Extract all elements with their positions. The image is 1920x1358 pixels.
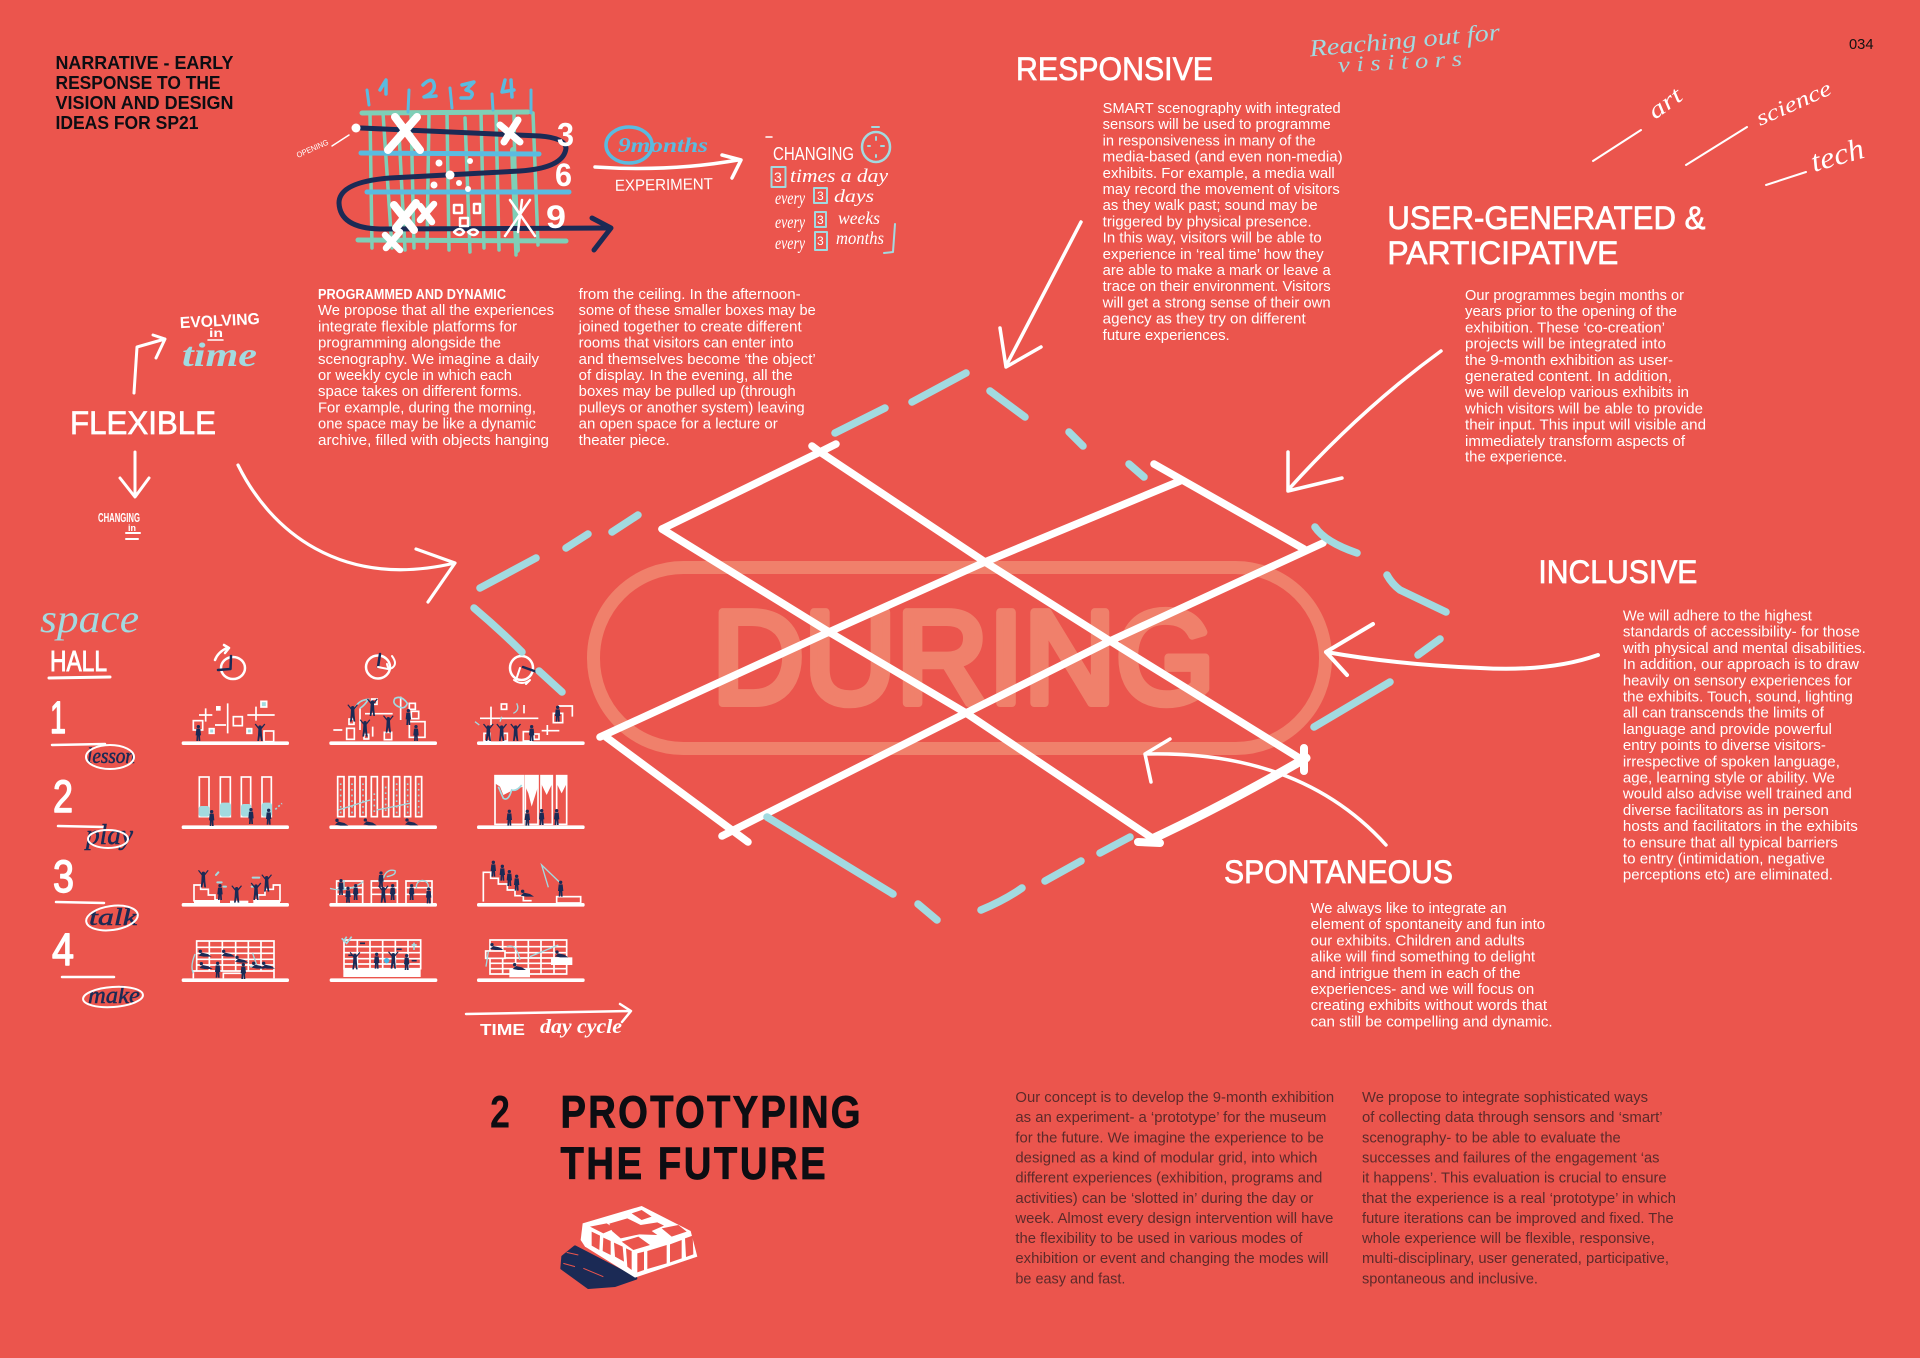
body text: prototyping columns: whole experience will be flexible, responsive, xyxy=(1361,1231,1655,1247)
heading and text: inclusive: to ensure that all typical barriers xyxy=(1623,835,1838,851)
heading and text: responsive: will get a strong sense of their own xyxy=(1102,296,1331,312)
sketch: 9 months experiment arrow xyxy=(595,127,741,195)
body text: prototyping columns: future iterations can be improved and fixed. The xyxy=(1362,1211,1674,1227)
section heading: prototyping the future: THE FUTURE xyxy=(560,1138,826,1189)
body text: prototyping columns: it happens’. This evaluation is crucial to ensure xyxy=(1362,1171,1667,1187)
note: changing in: in xyxy=(128,523,136,533)
note: art science tech xyxy=(1593,75,1868,185)
heading and text: inclusive: would also advise well trained and xyxy=(1622,787,1852,803)
heading and text: inclusive xyxy=(1538,554,1866,884)
body text: prototyping columns: Our concept is to develop the 9-month exhibition xyxy=(1015,1090,1334,1106)
arrow: flexible to grid xyxy=(238,465,455,602)
heading and text: user-generated and participative: PARTICIPATIVE xyxy=(1387,235,1618,271)
row labels: lesson play talk make: make xyxy=(88,983,140,1009)
note: evolving in time: time xyxy=(182,337,257,374)
heading and text: user-generated and participative: years prior to the opening of the xyxy=(1465,304,1677,320)
heading and text: spontaneous: and intrigue them in each of the xyxy=(1311,966,1521,982)
text block: programmed and dynamic: theater piece. xyxy=(579,433,670,449)
text block: programmed and dynamic: some of these smaller boxes may be xyxy=(579,303,816,319)
sketch: nine month grid timeline: 3 xyxy=(557,116,574,153)
arrow: spontaneous xyxy=(1145,739,1386,845)
body text: prototyping columns: that the experience is a real ‘prototype’ in which xyxy=(1362,1191,1676,1207)
row labels: lesson play talk make: 4 xyxy=(52,924,74,975)
note: reaching out for visitors: v i s i t o r s xyxy=(1337,46,1462,77)
heading and text: user-generated and participative: we will develop various exhibits in xyxy=(1464,385,1689,401)
arrow: user-generated xyxy=(1288,351,1441,491)
text block: programmed and dynamic: scenography. We imagine a daily xyxy=(318,352,540,368)
heading and text: inclusive: In addition, our approach is to draw xyxy=(1623,657,1859,673)
body text: prototyping columns: multi-disciplinary, user generated, participative, xyxy=(1362,1251,1669,1267)
scene: lesson evening xyxy=(475,703,585,745)
note: changing in: CHANGING xyxy=(98,510,140,525)
heading and text: spontaneous: creating exhibits without words that xyxy=(1311,998,1547,1014)
note: evolving in time: in xyxy=(209,326,223,340)
text block: programmed and dynamic: one space may be like a dynamic xyxy=(318,416,536,432)
arrow: responsive xyxy=(1000,222,1081,367)
label: space hall: space xyxy=(40,596,139,641)
scene: talk morning xyxy=(182,870,289,907)
heading and text: user-generated and participative xyxy=(1387,200,1706,466)
time day cycle arrow: day cycle xyxy=(540,1016,622,1038)
heading and text: user-generated and participative: which visitors will be able to provide xyxy=(1464,402,1703,418)
sketch: changing schedule notes: weeks xyxy=(838,208,880,228)
sketch: nine month grid timeline: 6 xyxy=(555,157,572,193)
text block: programmed and dynamic: joined together to create different xyxy=(578,320,802,336)
icon: afternoon clock xyxy=(366,654,395,678)
heading and text: responsive: are able to make a mark or leave a xyxy=(1103,263,1332,279)
sketch: nine month grid timeline: 9 xyxy=(546,199,566,235)
row labels: lesson play talk make xyxy=(50,692,144,1009)
heading and text: user-generated and participative: their input. This input will visible and xyxy=(1465,418,1706,434)
text block: programmed and dynamic: PROGRAMMED AND DYNAMIC xyxy=(318,287,506,303)
note: evolving in time xyxy=(179,311,260,374)
scene: play evening xyxy=(477,776,585,829)
body text: prototyping columns: spontaneous and inclusive. xyxy=(1362,1272,1538,1288)
heading and text: user-generated and participative: generated content. In addition, xyxy=(1465,369,1672,385)
sketch: changing schedule notes: 3 xyxy=(817,234,824,248)
heading and text: responsive: future experiences. xyxy=(1103,328,1230,344)
sketch: changing schedule notes: every xyxy=(775,188,805,208)
text block: programmed and dynamic xyxy=(318,287,816,449)
heading: flexible: FLEXIBLE xyxy=(70,405,216,441)
row labels: lesson play talk make: play xyxy=(84,820,134,851)
text block: programmed and dynamic: programming alongside the xyxy=(318,336,501,352)
heading and text: inclusive: irrespective of spoken language, xyxy=(1623,754,1840,770)
text block: programmed and dynamic: an open space for a lecture or xyxy=(579,416,778,432)
heading and text: responsive: exhibits. For example, a media wall xyxy=(1103,166,1335,182)
dashed outer platform xyxy=(474,373,1446,920)
space by time matrix xyxy=(182,697,585,982)
heading and text: inclusive: perceptions etc) are eliminated. xyxy=(1623,868,1833,884)
heading and text: spontaneous: We always like to integrate an xyxy=(1311,901,1507,917)
heading and text: inclusive: hosts and facilitators in the exhibits xyxy=(1623,819,1858,835)
heading and text: user-generated and participative: projects will be integrated into xyxy=(1465,336,1666,352)
document title: VISION AND DESIGN xyxy=(56,93,234,113)
time day cycle arrow: TIME xyxy=(480,1022,525,1039)
arrow: flexible down to changing xyxy=(120,452,149,497)
scene: play morning xyxy=(182,777,289,829)
body text: prototyping columns xyxy=(1014,1090,1676,1288)
heading and text: spontaneous: SPONTANEOUS xyxy=(1224,854,1453,890)
text block: programmed and dynamic: rooms that visitors can enter into xyxy=(579,336,794,352)
icon: evening clock xyxy=(510,656,537,684)
row labels: lesson play talk make: 2 xyxy=(53,771,73,822)
heading and text: responsive: experience in ‘real time’ how they xyxy=(1103,247,1324,263)
sketch: 9 months experiment arrow: EXPERIMENT xyxy=(615,176,713,195)
heading and text: inclusive: with physical and mental disabilities. xyxy=(1622,641,1866,657)
modular grid diagram xyxy=(600,444,1323,843)
heading and text: responsive: RESPONSIVE xyxy=(1016,51,1213,87)
body text: prototyping columns: as an experiment- a ‘prototype’ for the museum xyxy=(1015,1110,1326,1126)
heading and text: inclusive: heavily on sensory experiences for xyxy=(1623,673,1852,689)
during pill background xyxy=(594,568,1326,748)
heading and text: user-generated and participative: the 9-month exhibition as user- xyxy=(1465,353,1673,369)
body text: prototyping columns: different experiences (exhibition, programs and xyxy=(1015,1171,1322,1187)
text block: programmed and dynamic: and themselves become ‘the object’ xyxy=(579,352,816,368)
heading and text: inclusive: to entry (intimidation, negative xyxy=(1623,852,1825,868)
heading and text: spontaneous: element of spontaneity and fun into xyxy=(1311,917,1545,933)
heading and text: responsive: trace on their environment. Visitors xyxy=(1103,279,1331,295)
note: evolving in time: EVOLVING xyxy=(179,311,260,332)
scene: lesson morning xyxy=(182,701,289,745)
arrow: flexible up to evolving xyxy=(134,335,165,393)
text block: programmed and dynamic: or weekly cycle in which each xyxy=(318,368,512,384)
page number: 034 xyxy=(1849,36,1874,53)
icon: morning clock xyxy=(215,645,245,679)
row labels: lesson play talk make: talk xyxy=(89,905,137,931)
note: art science tech: art xyxy=(1643,82,1689,125)
heading and text: responsive: SMART scenography with integrated xyxy=(1103,101,1341,117)
time day cycle arrow xyxy=(466,1004,631,1039)
sketch: changing schedule notes: every xyxy=(775,233,805,253)
heading and text: responsive: In this way, visitors will be able to xyxy=(1103,230,1322,246)
text block: programmed and dynamic: For example, during the morning, xyxy=(318,400,536,416)
text block: programmed and dynamic: from the ceiling. In the afternoon- xyxy=(579,287,801,303)
row labels: lesson play talk make: 1 xyxy=(50,692,66,743)
document title: NARRATIVE - EARLY xyxy=(56,53,234,73)
heading and text: user-generated and participative: the experience. xyxy=(1465,450,1567,466)
heading and text: responsive: in responsiveness in many of the xyxy=(1103,134,1316,150)
body text: prototyping columns: for the future. We imagine the experience to be xyxy=(1015,1130,1324,1146)
heading and text: inclusive: diverse facilitators as in person xyxy=(1623,803,1829,819)
label: space hall xyxy=(40,596,139,678)
sketch: changing schedule notes xyxy=(766,127,895,253)
scene: make afternoon xyxy=(330,937,437,982)
heading and text: inclusive: age, learning style or ability. We xyxy=(1623,770,1835,786)
body text: prototyping columns: of collecting data through sensors and ‘smart’ xyxy=(1362,1110,1663,1126)
scene: talk evening xyxy=(477,861,585,907)
sketch: changing schedule notes: every xyxy=(775,212,805,232)
sketch: changing schedule notes: 3 xyxy=(817,213,824,227)
scene: lesson afternoon xyxy=(329,697,437,745)
document title xyxy=(56,53,234,133)
heading and text: inclusive: We will adhere to the highest xyxy=(1623,608,1812,624)
scene: play afternoon xyxy=(329,777,437,829)
sketch: nine month grid timeline: OPENING xyxy=(295,138,330,160)
row labels: lesson play talk make: lesson xyxy=(87,743,135,768)
heading and text: user-generated and participative: Our programmes begin months or xyxy=(1465,288,1684,304)
sketch: 9 months experiment arrow: 9months xyxy=(618,133,708,157)
section heading: prototyping the future: PROTOTYPING xyxy=(560,1087,861,1137)
note: art science tech: science xyxy=(1752,75,1835,131)
row labels: lesson play talk make: 3 xyxy=(53,851,74,902)
text block: programmed and dynamic: pulleys or another system) leaving xyxy=(579,400,805,416)
heading and text: inclusive: entry points to diverse visitors- xyxy=(1623,738,1826,754)
during pill background: DURING xyxy=(712,584,1215,731)
section heading: prototyping the future: 2 xyxy=(490,1087,510,1138)
text block: programmed and dynamic: We propose that all the experiences xyxy=(318,303,554,319)
text block: programmed and dynamic: archive, filled with objects hanging xyxy=(318,433,549,449)
arrow: inclusive xyxy=(1326,624,1598,675)
heading and text: responsive: agency as they try on different xyxy=(1103,312,1306,328)
heading and text: responsive: sensors will be used to programme xyxy=(1103,117,1331,133)
body text: prototyping columns: activities) can be ‘slotted in’ during the day or xyxy=(1015,1191,1314,1207)
sketch: changing schedule notes: times a day xyxy=(790,166,889,187)
text block: programmed and dynamic: of display. In the evening, all the xyxy=(579,368,793,384)
heading and text: inclusive: standards of accessibility- for those xyxy=(1623,625,1860,641)
scene: make evening xyxy=(477,940,585,982)
body text: prototyping columns: successes and failures of the engagement ‘as xyxy=(1362,1150,1660,1166)
scene: talk afternoon xyxy=(329,870,437,907)
sketch: changing schedule notes: CHANGING xyxy=(773,144,854,164)
sketch: nine month grid timeline xyxy=(295,80,611,255)
body text: prototyping columns: be easy and fast. xyxy=(1015,1272,1125,1288)
note: changing in xyxy=(98,510,140,539)
icon: modular box xyxy=(562,1206,697,1288)
heading and text: responsive: may record the movement of visitors xyxy=(1103,182,1340,198)
heading and text: responsive xyxy=(1016,51,1343,344)
text block: programmed and dynamic: integrate flexible platforms for xyxy=(318,320,517,336)
document title: IDEAS FOR SP21 xyxy=(56,113,198,133)
heading and text: spontaneous: can still be compelling and dynamic. xyxy=(1311,1014,1553,1030)
text block: programmed and dynamic: space takes on different forms. xyxy=(318,384,522,400)
text block: programmed and dynamic: boxes may be pulled up (through xyxy=(579,384,796,400)
body text: prototyping columns: scenography- to be able to evaluate the xyxy=(1362,1130,1621,1146)
sketch: changing schedule notes: months xyxy=(836,228,884,248)
body text: prototyping columns: week. Almost every design intervention will have xyxy=(1014,1211,1333,1227)
note: reaching out for visitors xyxy=(1307,20,1502,77)
heading and text: inclusive: INCLUSIVE xyxy=(1538,554,1697,590)
document title: RESPONSE TO THE xyxy=(56,73,220,93)
sketch: changing schedule notes: days xyxy=(834,186,874,206)
note: art science tech: tech xyxy=(1807,132,1868,179)
heading and text: spontaneous xyxy=(1224,854,1553,1030)
heading and text: spontaneous: experiences- and we will focus on xyxy=(1311,982,1534,998)
body text: prototyping columns: the flexibility to be used in various modes of xyxy=(1015,1231,1303,1247)
heading and text: user-generated and participative: exhibition. These ‘co-creation’ xyxy=(1465,320,1665,336)
heading and text: responsive: as they walk past; sound may be xyxy=(1103,198,1318,214)
note: reaching out for visitors: Reaching out for xyxy=(1307,20,1502,62)
heading and text: responsive: media-based (and even non-media) xyxy=(1103,150,1343,166)
body text: prototyping columns: designed as a kind of modular grid, into which xyxy=(1015,1150,1317,1166)
label: space hall: HALL xyxy=(50,646,107,678)
heading and text: inclusive: language and provide powerful xyxy=(1623,722,1832,738)
heading and text: responsive: triggered by physical presence. xyxy=(1103,214,1312,230)
heading and text: user-generated and participative: USER-GENERATED & xyxy=(1387,200,1705,236)
heading and text: inclusive: the exhibits. Touch, sound, lighting xyxy=(1623,690,1853,706)
sketch: changing schedule notes: 3 xyxy=(817,189,824,203)
body text: prototyping columns: We propose to integrate sophisticated ways xyxy=(1362,1090,1648,1106)
heading and text: user-generated and participative: immediately transform aspects of xyxy=(1465,434,1686,450)
heading and text: inclusive: all can transcends the limits of xyxy=(1623,706,1825,722)
sketch: changing schedule notes: 3 xyxy=(774,169,782,185)
scene: make morning xyxy=(182,941,289,982)
heading and text: spontaneous: alike will find something to delight xyxy=(1311,950,1535,966)
body text: prototyping columns: exhibition or event and changing the modes will xyxy=(1015,1251,1328,1267)
section heading: prototyping the future xyxy=(490,1087,861,1189)
heading and text: spontaneous: our exhibits. Children and adults xyxy=(1311,934,1525,950)
